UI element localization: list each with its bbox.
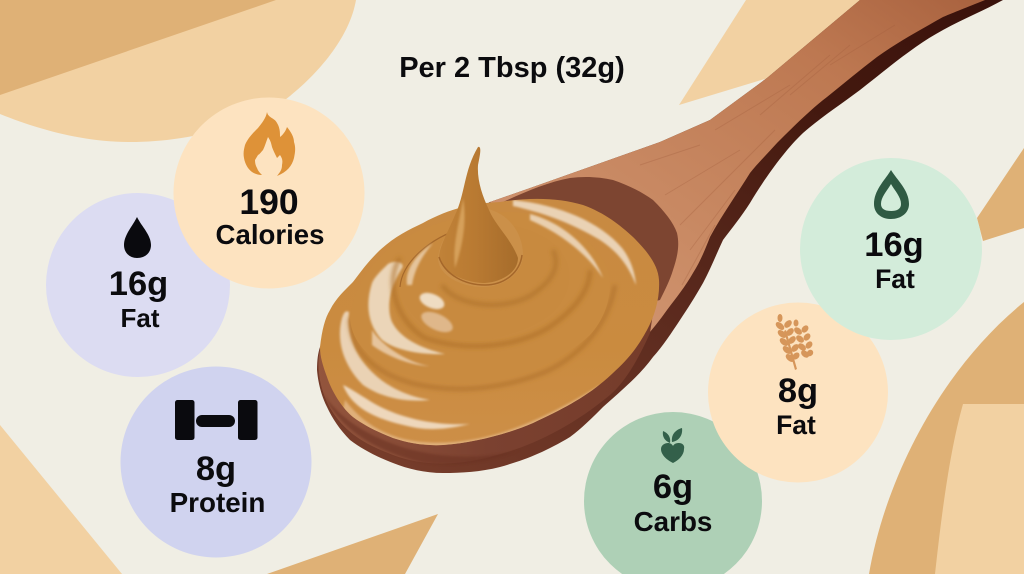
bottom-right background shape bbox=[869, 302, 1024, 574]
icon: heart with leaves bbox=[661, 428, 684, 463]
ring three body bbox=[400, 224, 569, 340]
circle: 16g fat, lavender bbox=[46, 193, 230, 377]
bottom-left triangle shape bbox=[0, 425, 122, 574]
icon: flame bbox=[244, 112, 295, 176]
label: Carbs: Carbs bbox=[634, 506, 712, 537]
base colour bbox=[320, 198, 660, 446]
circle: 8g fat, peach bbox=[708, 302, 888, 482]
lower roll highlight bbox=[343, 385, 470, 429]
label: Protein: Protein bbox=[170, 487, 265, 518]
bottom tan edge bbox=[342, 384, 600, 446]
bottom triangle shape bbox=[267, 514, 438, 574]
ring three highlights bbox=[418, 291, 446, 311]
ring three valley bbox=[442, 250, 556, 305]
icon: wheat bbox=[774, 314, 815, 370]
icon: black drop bbox=[124, 217, 151, 258]
ring two highlight left bbox=[368, 262, 445, 354]
ring four body bbox=[438, 208, 523, 287]
circle: 8g protein bbox=[120, 366, 312, 558]
top triangle shape bbox=[679, 0, 870, 105]
wooden spoon with peanut butter bbox=[310, 0, 1003, 473]
outer roll highlight bbox=[340, 311, 430, 401]
peak highlight bbox=[454, 198, 465, 268]
peak base line bbox=[439, 255, 522, 285]
peak of swirl bbox=[439, 147, 518, 283]
valley inside ring two bbox=[393, 258, 590, 346]
circle: 16g fat, mint bbox=[800, 158, 982, 340]
icon: dumbbell bbox=[175, 400, 258, 440]
spoon bowl hollow bbox=[503, 177, 678, 310]
wood grain bbox=[640, 25, 895, 285]
value: 190: 190 bbox=[239, 182, 299, 222]
value: 16g: 16g bbox=[109, 265, 168, 303]
valley under ring two bbox=[350, 285, 615, 389]
lip bottom shadow bbox=[322, 392, 520, 465]
circle: 190 calories bbox=[174, 98, 364, 288]
ring three outline bbox=[400, 234, 446, 287]
label: Fat: Fat bbox=[120, 303, 160, 333]
label: Fat: Fat bbox=[776, 410, 816, 440]
title: Per 2 Tbsp (32g) bbox=[399, 52, 625, 84]
circle: 6g carbs bbox=[584, 412, 762, 574]
top-left background shape bbox=[0, 0, 356, 142]
lower spoon lip bbox=[318, 300, 655, 464]
ring two body bbox=[350, 304, 607, 339]
value: 16g: 16g bbox=[864, 226, 924, 264]
value: 8g: 8g bbox=[778, 372, 818, 410]
value: 6g: 6g bbox=[653, 468, 693, 506]
right triangle shape bbox=[977, 148, 1024, 241]
value: 8g: 8g bbox=[196, 450, 236, 488]
ring two highlight upper right bbox=[530, 214, 603, 278]
spoon handle and bowl wood bbox=[490, 0, 985, 340]
ring two secondary highlight bbox=[372, 330, 430, 366]
peanut butter mass bbox=[320, 198, 660, 446]
upper right outer band highlight bbox=[513, 200, 636, 285]
label: Calories: Calories bbox=[216, 219, 324, 250]
icon: green outlined drop bbox=[874, 170, 909, 219]
label: Fat: Fat bbox=[875, 264, 915, 294]
spoon silhouette and dark edge bbox=[317, 0, 1003, 473]
